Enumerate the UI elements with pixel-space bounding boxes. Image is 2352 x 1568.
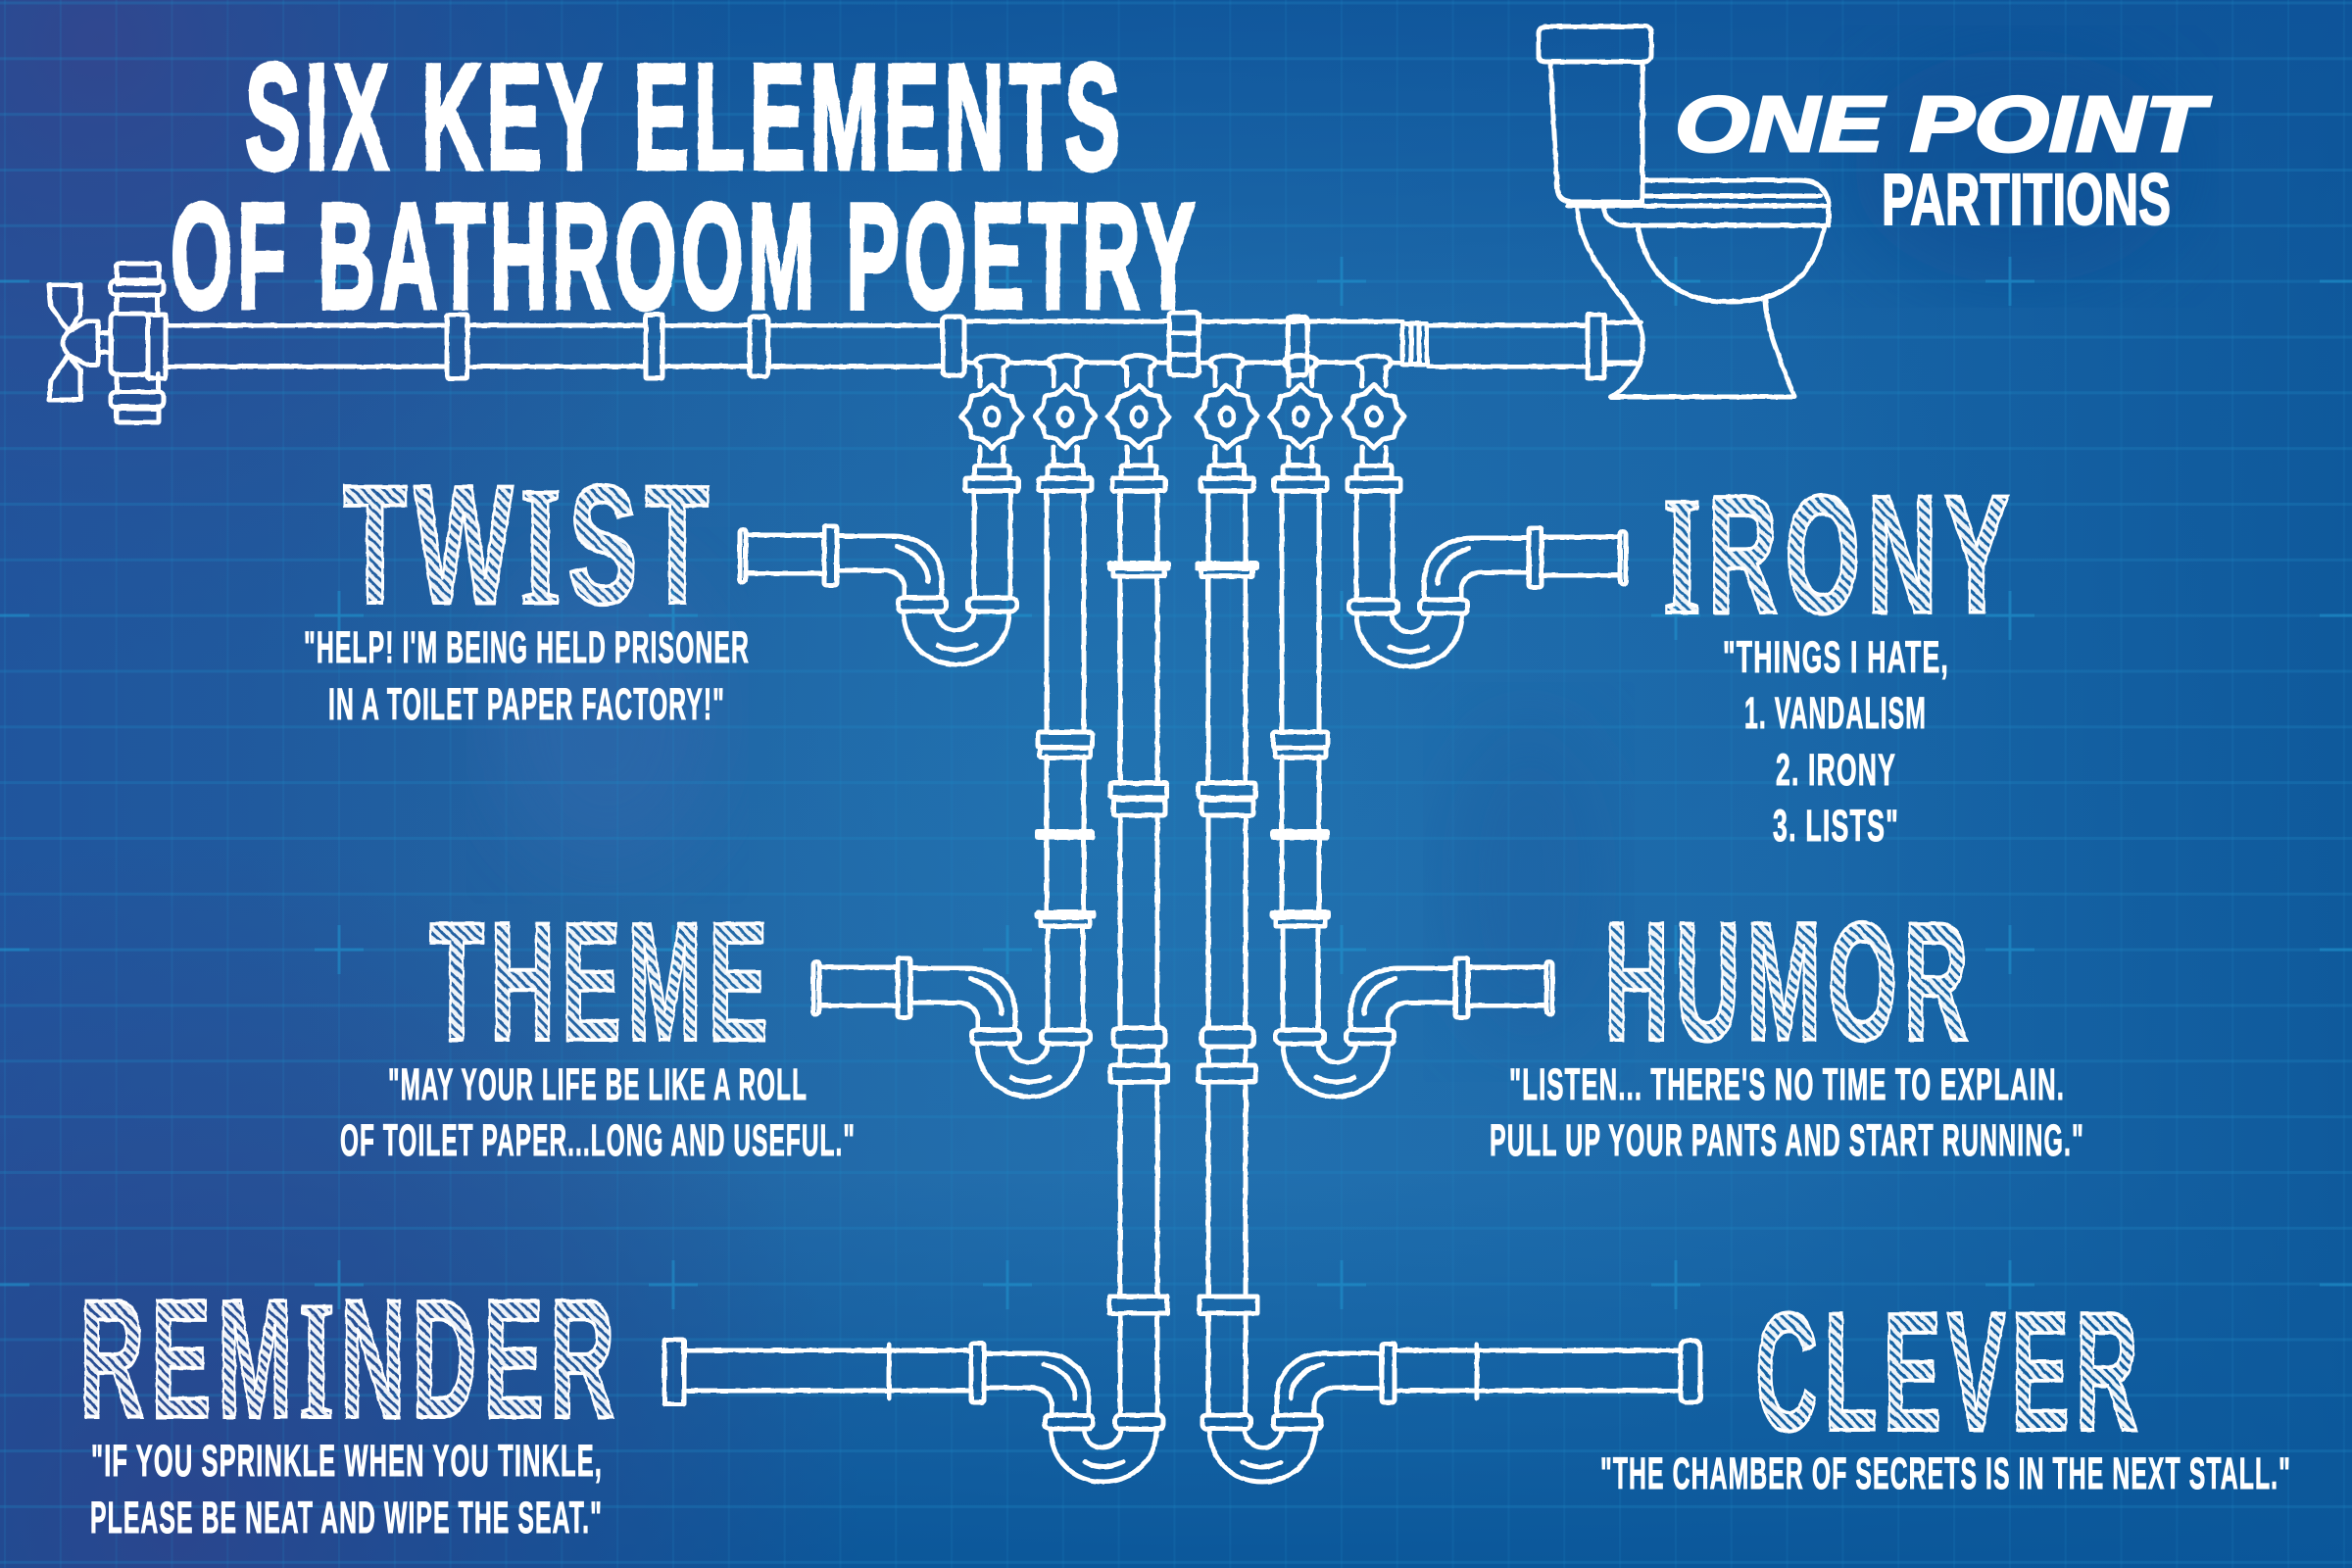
quote: irony list: 1. VANDALISM [1744, 688, 1927, 738]
quote: theme: OF TOILET PAPER...LONG AND USEFUL." [340, 1115, 856, 1165]
heading: REMINDER: REMINDER [79, 1265, 621, 1454]
six branch valves and vertical pipes [961, 356, 1404, 1415]
quote: twist: IN A TOILET PAPER FACTORY!" [328, 679, 725, 729]
pipe trap: irony [1349, 528, 1626, 666]
pipe collars [1038, 732, 1093, 758]
pipe trap: theme [813, 958, 1090, 1097]
quote: irony list [1723, 632, 1949, 851]
pipes 3 and 4 [1120, 492, 1246, 1415]
pipe trap: clever [1202, 1341, 1700, 1482]
pipe trap: reminder [664, 1340, 1163, 1482]
quote: theme [340, 1059, 856, 1165]
quote: irony list: "THINGS I HATE, [1723, 632, 1949, 682]
quote: reminder: PLEASE BE NEAT AND WIPE THE SEAT." [90, 1493, 603, 1543]
heading: THEME: THEME [429, 888, 774, 1076]
pipe trap: humor [1276, 958, 1552, 1097]
heading: IRONY: IRONY [1663, 461, 2016, 650]
title [171, 33, 1200, 340]
quote: irony list: 2. IRONY [1776, 745, 1896, 795]
quote: irony list: 3. LISTS" [1773, 801, 1899, 851]
pipe trap: twist [740, 526, 1016, 664]
heading: TWIST: TWIST [343, 451, 716, 640]
quote: twist: "HELP! I'M BEING HELD PRISONER [304, 622, 750, 672]
quote: humor [1490, 1059, 2084, 1165]
quote: reminder [90, 1436, 603, 1543]
main supply pipe with shut-off valve [49, 264, 1638, 422]
logo: One Point Partitions: PARTITIONS [1882, 159, 2171, 240]
icon: wing-handle valve [49, 264, 166, 422]
icon: toilet [1539, 26, 1829, 397]
title: SIX KEY ELEMENTS [245, 33, 1125, 201]
logo: One Point Partitions: ONE POINT [1675, 80, 2212, 168]
quote: theme: "MAY YOUR LIFE BE LIKE A ROLL [388, 1059, 808, 1109]
quote: reminder: "IF YOU SPRINKLE WHEN YOU TINKLE, [91, 1436, 603, 1486]
logo: One Point Partitions [1675, 80, 2212, 240]
heading: HUMOR: HUMOR [1604, 888, 1975, 1076]
quote: twist [304, 622, 750, 729]
title: OF BATHROOM POETRY [171, 172, 1200, 340]
pipes 1 and 6 [974, 492, 1393, 600]
pipes 2 and 5 [1047, 492, 1319, 1029]
